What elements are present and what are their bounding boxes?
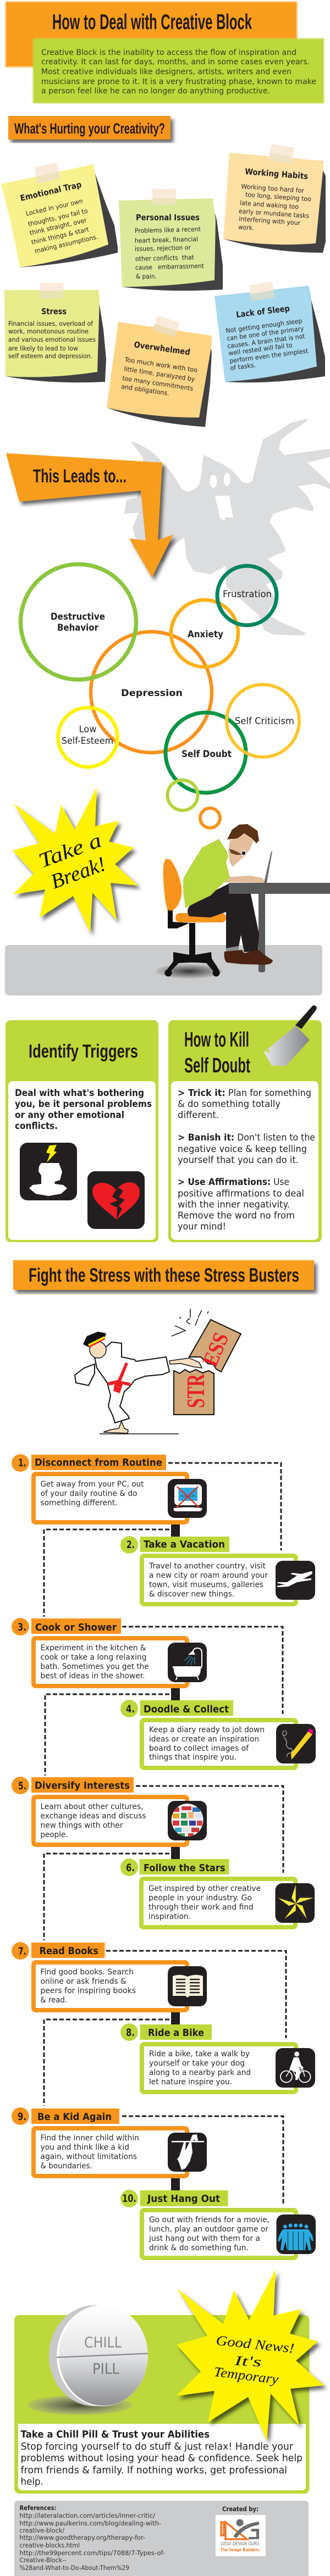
- icon: group of friends: [276, 2215, 316, 2254]
- sticky note: personal issues: [119, 189, 223, 291]
- sticky note: stress: Financial issues, overload of: [8, 320, 94, 327]
- sticky note: lack of sleep: perform even the simplest: [229, 347, 309, 365]
- sticky note: emotional trap: making assumptions.: [34, 233, 99, 255]
- step 10: Just Hang Out: [146, 2193, 220, 2205]
- panel: take a chill pill: Take a Chill Pill & Trust your Abilities: [21, 2429, 210, 2440]
- intro panel: [33, 38, 324, 103]
- step 1: something different.: [41, 1499, 118, 1507]
- circle labels: Self Criticism: [235, 716, 294, 727]
- step 5: new things with other: [41, 1821, 123, 1830]
- panel: take a chill pill: problems without losing your head & confidence. Seek help: [21, 2452, 302, 2464]
- sticky note: emotional trap: Locked in your own: [25, 197, 84, 218]
- circle labels: Depression: [121, 688, 183, 699]
- icon: chill pill: CHILL: [84, 2334, 122, 2351]
- circle labels: Self Doubt: [182, 749, 232, 760]
- footer panel: references and credit: http://www.goodtherapy.org/therapy-for-: [20, 2534, 145, 2541]
- sticky note: overwhelmed: and obligations.: [121, 382, 170, 397]
- circle labels: Low: [79, 724, 97, 735]
- sticky note: personal issues: other conflicts that: [135, 253, 194, 263]
- step 7: Read Books: [40, 1945, 98, 1957]
- step 6: 6.: [126, 1862, 135, 1874]
- intro panel: Most creative individuals like designers, artists, writers and even: [41, 68, 292, 76]
- footer panel: references and credit: creative-block/: [20, 2527, 64, 2534]
- title banner: [6, 2, 297, 67]
- sticky note: stress: Stress: [41, 307, 67, 316]
- sticky note: stress: [4, 283, 106, 382]
- panel: identify triggers: Deal with what's bothering: [15, 1088, 144, 1098]
- step 1: Disconnect from Routine: [35, 1457, 162, 1468]
- icon: head with lightning: [20, 1143, 77, 1200]
- panel: take a chill pill: Stop forcing yourself to do stuff & just relax! Handle your: [21, 2441, 294, 2452]
- footer panel: references and credit: http://www.paulkerins.com/blog/dealing-with-: [20, 2519, 161, 2527]
- sticky note: overwhelmed: [107, 315, 212, 427]
- step 9: Find the inner child within: [41, 2134, 139, 2143]
- step 5: [12, 1777, 283, 1940]
- footer panel: references and credit: Created by:: [222, 2505, 258, 2513]
- circle labels: Anxiety: [188, 629, 223, 640]
- panel: how to kill self doubt: > Banish it: Don't listen to the: [178, 1132, 315, 1143]
- circle labels: Destructive: [51, 611, 105, 622]
- sticky note: stress: work, monotonous routine: [8, 327, 89, 335]
- footer panel: references and credit: http://lateralaction.com/articles/inner-critic/: [20, 2512, 155, 2519]
- footer panel: references and credit: References:: [20, 2504, 56, 2512]
- sticky note: emotional trap: thoughts, you fail to: [28, 207, 89, 228]
- step 3: cook or take a long relaxing: [41, 1653, 146, 1662]
- step 2: Take a Vacation: [144, 1539, 225, 1550]
- footer panel: references and credit: [14, 2501, 309, 2576]
- sticky note: lack of sleep: Not getting enough sleep: [226, 317, 302, 335]
- panel: take a chill pill: help.: [21, 2476, 43, 2488]
- sticky note: working habits: late and waking too: [240, 199, 299, 210]
- step 1: [12, 1454, 281, 1617]
- sticky note: personal issues: Personal Issues: [136, 213, 200, 222]
- icon: cyclist: [276, 2048, 315, 2088]
- step 2: a new city or roam around your: [149, 1571, 268, 1580]
- step 10: just hang out with them for a: [148, 2234, 260, 2243]
- illustration: karate kick breaking stress board: ESS: [197, 1329, 234, 1370]
- sticky note: overwhelmed: Too much work with too: [124, 355, 198, 374]
- illustration: karate kick breaking stress board: [75, 1309, 241, 1434]
- sticky note: lack of sleep: Lack of Sleep: [235, 303, 290, 320]
- panel: how to kill self doubt: > Trick it: Plan for something: [178, 1088, 311, 1098]
- step 10: lunch, play an outdoor game or: [149, 2225, 268, 2234]
- sticky note: lack of sleep: can be one of the primary: [227, 325, 304, 342]
- panel: how to kill self doubt: negative voice & keep telling: [178, 1144, 307, 1154]
- step 7: & read.: [41, 1996, 67, 2005]
- step 8: Ride a bike, take a walk by: [149, 2050, 250, 2058]
- step 3: 3.: [18, 1621, 26, 1633]
- sticky note: emotional trap: think things & start: [31, 225, 90, 246]
- step 8: yourself or take your dog: [149, 2059, 245, 2068]
- floor: [5, 945, 322, 995]
- sticky note: stress: and various emotional issues: [8, 336, 96, 343]
- step 8: [120, 2023, 315, 2092]
- sticky note: personal issues: & pain.: [136, 272, 157, 280]
- sticky note: lack of sleep: causes. A brain that is not: [227, 332, 306, 350]
- step 1: of your daily routine & do: [41, 1489, 138, 1498]
- panel: how to kill self doubt: > Use Affirmations: Use: [178, 1177, 289, 1187]
- step 2: Travel to another country, visit: [148, 1562, 266, 1571]
- step 7: 7.: [18, 1945, 26, 1957]
- step 3: bath. Sometimes you get the: [41, 1662, 148, 1671]
- intro panel: Creative Block is the inability to access the flow of inspiration and: [41, 48, 296, 57]
- step 6: Get inspired by other creative: [148, 1884, 261, 1893]
- panel: take a chill pill: [14, 2305, 309, 2494]
- step 4: ideas or create an inspiration: [149, 1735, 259, 1744]
- icon: broken heart: [87, 1171, 145, 1229]
- sticky note: stress: are likely to lead to low: [8, 344, 78, 352]
- sticky note: working habits: Working too hard for: [241, 182, 305, 194]
- starburst: good news: [177, 2269, 324, 2441]
- panel: identify triggers: [6, 1020, 158, 1242]
- panel: identify triggers: conflicts.: [15, 1121, 58, 1131]
- panel: how to kill self doubt: with the inner negativity.: [178, 1199, 290, 1210]
- icon: chill pill: [28, 2305, 148, 2415]
- heading: fight the stress: [13, 1260, 314, 1290]
- sticky note: emotional trap: [1, 163, 118, 268]
- starburst: take a break: [13, 787, 138, 933]
- step 9: [12, 2107, 283, 2204]
- step 10: 10.: [122, 2193, 136, 2205]
- step 4: Doodle & Collect: [144, 1704, 229, 1715]
- step 1: Get away from your PC, out: [41, 1480, 144, 1489]
- step 4: Keep a diary ready to jot down: [149, 1726, 265, 1734]
- panel: how to kill self doubt: Self Doubt: [184, 1054, 250, 1077]
- step 4: board to collect images of: [149, 1744, 249, 1753]
- sticky note: working habits: [223, 144, 326, 253]
- footer panel: references and credit: creative-blocks.html: [20, 2541, 80, 2549]
- step 7: online or ask friends &: [41, 1977, 127, 1986]
- step 8: along to a nearby park and: [149, 2068, 251, 2077]
- icon: pencil doodle: [276, 1724, 316, 1763]
- step 3: Experiment in the kitchen &: [41, 1644, 146, 1653]
- panel: how to kill self doubt: & do something totally: [178, 1099, 280, 1109]
- icon: nautical star: [275, 1883, 315, 1923]
- starburst: good news: Temporary: [213, 2364, 280, 2387]
- arrow: this leads to: This Leads to...: [33, 466, 127, 487]
- panel: how to kill self doubt: different.: [178, 1110, 219, 1120]
- step 4: [120, 1700, 316, 1768]
- step 9: Be a Kid Again: [37, 2111, 112, 2123]
- step 7: [12, 1942, 286, 2106]
- sticky note: lack of sleep: [215, 282, 325, 382]
- step 9: you and think like a kid: [41, 2143, 129, 2152]
- step 6: [120, 1859, 315, 1927]
- starburst: take a break: Take a: [36, 829, 105, 872]
- step 4: things that inspire you.: [149, 1753, 237, 1762]
- step 5: Diversify Interests: [35, 1780, 130, 1791]
- starburst: good news: Good News!: [215, 2333, 295, 2356]
- icon: kid hanging from bar: [168, 2133, 207, 2172]
- logo: logo design guru: The Image Builders: [221, 2547, 260, 2552]
- sticky note: overwhelmed: Overwhelmed: [133, 340, 191, 357]
- step 7: peers for inspiring books: [41, 1987, 136, 1995]
- ghost illustration: [124, 419, 330, 636]
- icon: chill pill: PILL: [92, 2361, 119, 2378]
- icon: crossed out computer: [168, 1479, 207, 1518]
- step 3: best of ideas in the shower.: [41, 1672, 145, 1681]
- step 9: again, without limitations: [41, 2152, 137, 2161]
- sticky note: overwhelmed: too many commitments: [122, 374, 194, 392]
- illustration: karate kick breaking stress board: STR: [182, 1373, 210, 1408]
- starburst: good news: It's: [233, 2354, 262, 2370]
- footer panel: references and credit: http://the99percent.com/tips/7088/7-Types-of-: [20, 2549, 165, 2557]
- step 3: Cook or Shower: [35, 1622, 117, 1633]
- step 5: people.: [41, 1831, 68, 1839]
- step 3: [12, 1618, 283, 1776]
- sticky note: personal issues: heart break, financial: [135, 235, 198, 244]
- circle labels: [51, 589, 294, 760]
- icon: crossed out computer: Windows XP: [181, 1495, 195, 1498]
- sticky note: emotional trap: Emotional Trap: [19, 180, 82, 203]
- logo: logo design guru: LOGO DESIGN GURU: [221, 2541, 260, 2547]
- intro panel: a person feel like he can no longer do anything productive.: [41, 87, 270, 96]
- panel: identify triggers: or any other emotional: [15, 1110, 124, 1120]
- step 8: Ride a Bike: [148, 2027, 204, 2039]
- heading: what's hurting: What's Hurting your Creativity?: [14, 120, 165, 137]
- step 5: Learn about other cultures,: [41, 1802, 143, 1811]
- starburst: take a break: Break!: [48, 853, 109, 893]
- panel: how to kill self doubt: [168, 1005, 322, 1242]
- sticky note: lack of sleep: of tasks.: [230, 361, 256, 372]
- panel: how to kill self doubt: Remove the word no from: [178, 1210, 295, 1221]
- sticky note: working habits: Working Habits: [245, 166, 309, 181]
- sticky note: working habits: early or mundane tasks: [239, 207, 309, 220]
- sticky note: working habits: work.: [238, 223, 255, 232]
- step 5: exchange ideas and discuss: [41, 1812, 146, 1821]
- intro panel: creativity. It can last for days, months, and in some cases even years.: [41, 58, 310, 66]
- panel: how to kill self doubt: your mind!: [178, 1221, 226, 1232]
- step 10: drink & do something fun.: [149, 2244, 249, 2252]
- step 8: 8.: [126, 2027, 135, 2039]
- sticky note: personal issues: Problems like a recent: [135, 225, 201, 235]
- sticky note: working habits: interfering with your: [239, 215, 301, 227]
- step 10: [120, 2190, 316, 2258]
- step 4: 4.: [126, 1703, 135, 1715]
- heading: what's hurting: [8, 116, 170, 140]
- arrow: this leads to: [6, 453, 173, 577]
- thought bubble circles: [21, 564, 299, 828]
- panel: identify triggers: you, be it personal problems: [15, 1099, 152, 1109]
- panel: take a chill pill: from friends & family. If nothing works, get professional: [21, 2464, 287, 2476]
- circle labels: Behavior: [57, 622, 99, 633]
- step 6: Follow the Stars: [144, 1862, 226, 1874]
- panel: how to kill self doubt: yourself that you can do it.: [178, 1155, 299, 1165]
- icon: flag globe: [168, 1801, 207, 1840]
- step 1: 1.: [18, 1457, 26, 1469]
- sticky note: overwhelmed: little time, paralyzed by: [124, 365, 195, 383]
- illustration: stressed man at desk: [156, 824, 330, 978]
- sticky note: emotional trap: think straight, over: [29, 216, 87, 237]
- circle labels: Self-Esteem: [62, 736, 113, 747]
- step 6: through their work and find: [148, 1903, 254, 1912]
- step 6: people in your industry. Go: [148, 1894, 252, 1902]
- step 2: [120, 1536, 315, 1604]
- sticky note: personal issues: issues, rejection or: [135, 243, 191, 253]
- panel: how to kill self doubt: How to Kill: [184, 1028, 249, 1051]
- icon: open book: [168, 1966, 207, 2006]
- step 9: & boundaries.: [41, 2162, 92, 2171]
- step 2: town, visit museums, galleries: [149, 1581, 263, 1589]
- sticky note: stress: self esteem and depression.: [8, 352, 92, 360]
- impact lines: [172, 1309, 208, 1336]
- icon: airplane: [276, 1561, 315, 1600]
- icon: shower and bathtub: [168, 1643, 207, 1682]
- footer panel: references and credit: %28and-What-to-Do-About-Them%29: [20, 2564, 129, 2572]
- intro panel: musicians are prone to it. It is a very frustrating phase, known to make: [41, 77, 316, 86]
- step 2: 2.: [127, 1539, 135, 1551]
- step 2: & discover new things.: [149, 1590, 234, 1599]
- step 7: Find good books. Search: [41, 1968, 134, 1977]
- logo: logo design guru: [216, 2515, 266, 2556]
- step 9: 9.: [18, 2111, 26, 2123]
- panel: identify triggers: Identify Triggers: [29, 1041, 138, 1062]
- panel: how to kill self doubt: positive affirmations to deal: [178, 1188, 304, 1199]
- sticky note: lack of sleep: well rested will fail to: [228, 341, 293, 357]
- step 8: let nature inspire you.: [149, 2078, 232, 2087]
- step 10: Go out with friends for a movie,: [149, 2216, 270, 2224]
- circle labels: Frustration: [223, 589, 272, 600]
- step 5: 5.: [18, 1780, 26, 1792]
- sticky note: working habits: too long, sleeping too: [245, 191, 311, 203]
- icon: cleaver: [264, 1005, 317, 1066]
- sticky note: personal issues: cause embarrassment: [135, 262, 204, 271]
- footer panel: references and credit: Creative-Block--: [20, 2556, 66, 2564]
- step 6: inspiration.: [148, 1912, 191, 1921]
